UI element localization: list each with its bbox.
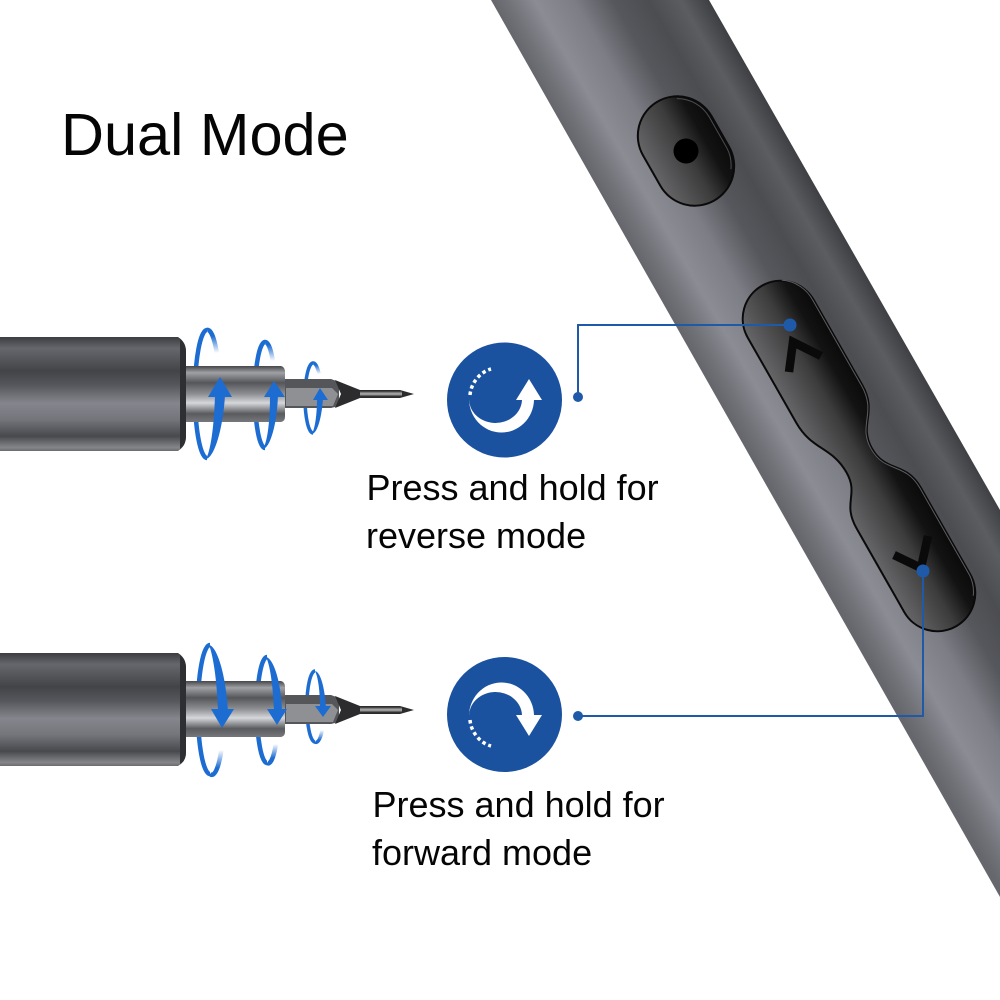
hex bit bbox=[285, 379, 339, 408]
text: forward mode: Press and hold for bbox=[372, 784, 665, 825]
icon: forward rotation bbox=[447, 657, 562, 772]
rotation ring backs bbox=[198, 645, 323, 775]
rotation arrows bbox=[206, 377, 328, 459]
callout line: reverse bbox=[573, 318, 796, 402]
callout line: forward bbox=[573, 564, 930, 721]
screwdriver tip: reverse mode bbox=[0, 330, 414, 459]
title: Dual Mode bbox=[61, 101, 349, 168]
icon: reverse rotation bbox=[447, 342, 562, 458]
bit tip bbox=[335, 696, 414, 724]
text: reverse mode: Press and hold for bbox=[366, 467, 659, 508]
text: reverse mode: reverse mode bbox=[366, 515, 586, 556]
rotation ring backs bbox=[195, 330, 321, 458]
screwdriver handle bbox=[491, 0, 1000, 897]
collar bbox=[186, 681, 285, 737]
screwdriver tip: forward mode bbox=[0, 645, 414, 775]
text: reverse mode bbox=[366, 467, 659, 556]
icon: up chevron bbox=[789, 342, 821, 372]
collar bbox=[186, 366, 285, 422]
text: forward mode bbox=[372, 784, 665, 873]
metal barrel bbox=[0, 337, 186, 451]
hex bit bbox=[285, 695, 339, 724]
direction rocker button bbox=[729, 267, 989, 645]
bit tip bbox=[335, 380, 414, 408]
metal barrel bbox=[0, 653, 186, 766]
power button bbox=[623, 82, 749, 220]
icon: down chevron bbox=[894, 536, 928, 568]
rotation arrows bbox=[209, 645, 331, 728]
text: forward mode: forward mode bbox=[372, 832, 592, 873]
